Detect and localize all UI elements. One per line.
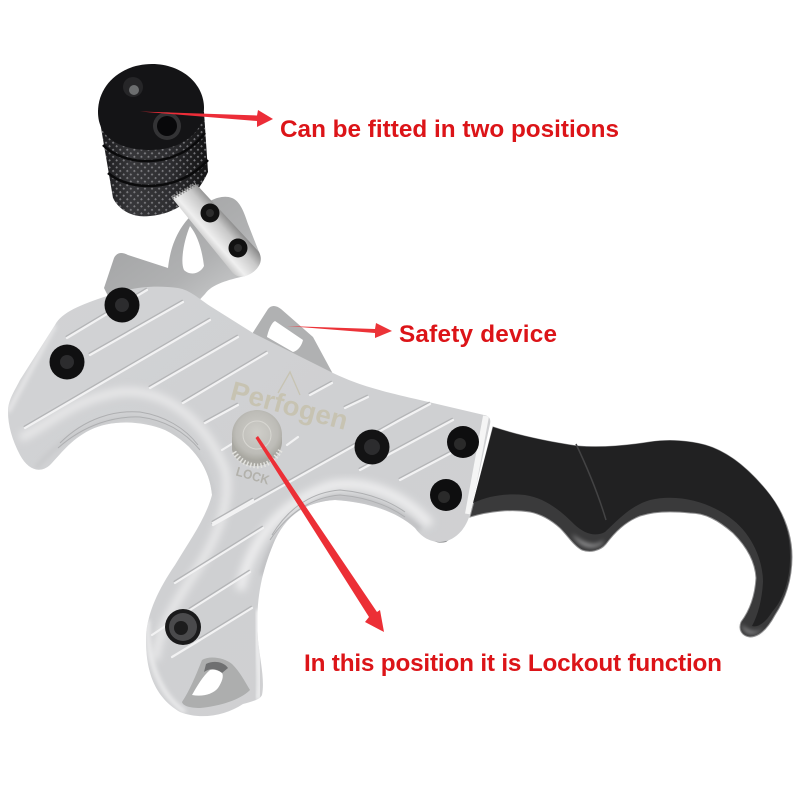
groove shadows xyxy=(24,288,452,638)
knurled barrel xyxy=(98,64,208,216)
safety device tab xyxy=(252,306,333,374)
arrow: lockout xyxy=(256,436,384,632)
lock knob xyxy=(232,410,282,466)
lower rim of body xyxy=(418,514,470,543)
connector pin xyxy=(172,184,261,277)
LOCK label: LOCK xyxy=(234,464,272,488)
main body xyxy=(8,287,490,716)
hook highlight patches xyxy=(572,534,764,634)
arrow: safety device xyxy=(287,323,392,338)
pivot plate behind body xyxy=(104,197,260,310)
arrow: two positions xyxy=(140,110,273,127)
lower loop casting xyxy=(182,657,250,708)
annotated product diagram xyxy=(8,64,792,716)
hook trigger xyxy=(470,427,792,637)
arch ribs xyxy=(58,412,405,540)
barrel screw holes xyxy=(123,77,181,140)
logo engraving: Perfogen xyxy=(227,376,351,436)
label: two positions: Can be fitted in two positions xyxy=(280,116,619,143)
arch highlights xyxy=(20,392,227,660)
grooves xyxy=(25,290,453,657)
label: lockout function: In this position it is Lockout function xyxy=(304,650,722,677)
screws xyxy=(50,288,479,645)
label: safety device: Safety device xyxy=(399,321,557,348)
